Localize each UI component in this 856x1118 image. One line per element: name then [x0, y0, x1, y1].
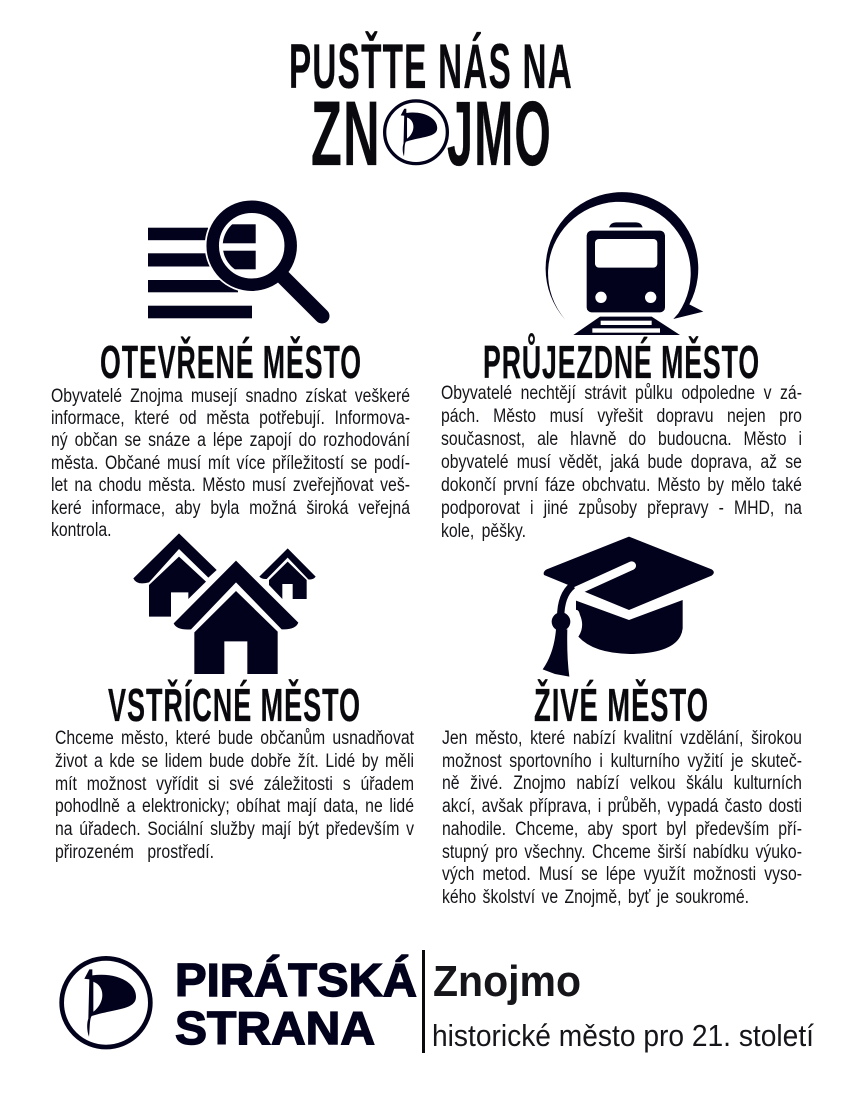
text block — [442, 728, 809, 913]
title — [289, 31, 573, 185]
text block: stupný pro všechny. Chceme širší nabídku výuko- — [442, 842, 802, 863]
text block: podporovat i jiné způsoby přepravy - MHD, na — [441, 498, 802, 519]
panel: vstřícné město — [55, 533, 421, 868]
text block: pách. Město musí vyřešit dopravu nejen pro — [441, 406, 802, 427]
icon: houses — [133, 533, 316, 674]
text block: let na chodu města. Město musí zveřejňovat veš- — [51, 475, 410, 496]
text block: současnost, ale hlavně do budoucna. Město i — [441, 429, 802, 450]
text block: kontrola. — [51, 520, 111, 541]
slogan: historické město pro 21. století — [432, 1018, 814, 1053]
text block: akcí, avšak příprava, i průběh, vypadá často dosti — [442, 796, 802, 817]
footer — [62, 950, 814, 1054]
text block: možnost sportovního i kulturního vyžití je skuteč- — [442, 751, 802, 772]
text block: dokončí první fáze obchvatu. Město by mělo také — [441, 475, 802, 496]
heading: VSTŘÍCNÉ MĚSTO — [108, 679, 361, 731]
text block: kole, pěšky. — [441, 521, 526, 542]
heading: ŽIVÉ MĚSTO — [534, 679, 709, 731]
text block: mít možnost vyřídit si své záležitosti s úřadem — [55, 774, 414, 795]
text block: Obyvatelé nechtějí strávit půlku odpoledne v zá- — [441, 383, 802, 404]
panel: živé město — [442, 537, 809, 913]
text block: Jen město, které nabízí kvalitní vzdělání, širokou — [442, 728, 802, 749]
icon: graduation cap — [543, 537, 714, 677]
text block: na úřadech. Sociální služby mají být především v — [55, 819, 414, 840]
title: ZN — [311, 83, 381, 185]
text block: obyvatelé musí vědět, jaká bude doprava, až se — [441, 452, 802, 473]
icon: pirate logo — [62, 958, 150, 1047]
text block — [51, 385, 417, 545]
party name: PIRÁTSKÁ — [175, 954, 417, 1006]
text block: informace, které od města potřebují. Informova- — [51, 408, 410, 429]
text block: Chceme město, které bude občanům usnadňovat — [55, 728, 414, 749]
text block: ně živé. Znojmo nabízí velkou škálu kulturních — [442, 773, 802, 794]
icon: magnifying glass over lines — [148, 199, 322, 318]
text block — [55, 728, 421, 868]
icon: train — [546, 192, 703, 335]
text block: nahodile. Chceme, aby sport byl především pří- — [442, 819, 802, 840]
text block: keré informace, aby byla možná široká veřejná — [51, 498, 410, 519]
party name: STRANA — [175, 1002, 375, 1054]
panel: otevřené město — [51, 199, 417, 545]
text block: pohodlně a elektronicky; obíhat mají data, ne lidé — [55, 796, 414, 817]
title: JMO — [447, 83, 552, 185]
icon: pirate logo in title — [385, 101, 447, 164]
title: PUSŤTE NÁS NA — [289, 31, 573, 102]
text block: ný občan se snáze a lépe zapojí do rozhodování — [51, 430, 410, 451]
text block: kého školství ve Znojmě, byť je soukromé. — [442, 887, 749, 908]
panel: průjezdné město — [441, 192, 809, 547]
party name — [175, 954, 417, 1054]
text block: vých metod. Musí se lépe využít možnosti vyso- — [442, 864, 802, 885]
text block: život a kde se lidem bude dobře žít. Lidé by měli — [55, 751, 414, 772]
heading: OTEVŘENÉ MĚSTO — [100, 336, 362, 388]
city name: Znojmo — [433, 957, 581, 1006]
text block: města. Občané musí mít více příležitostí se podí- — [51, 453, 410, 474]
text block: přirozeném prostředí. — [55, 842, 214, 863]
text block: Obyvatelé Znojma musejí snadno získat veškeré — [51, 386, 410, 407]
text block — [441, 382, 809, 547]
